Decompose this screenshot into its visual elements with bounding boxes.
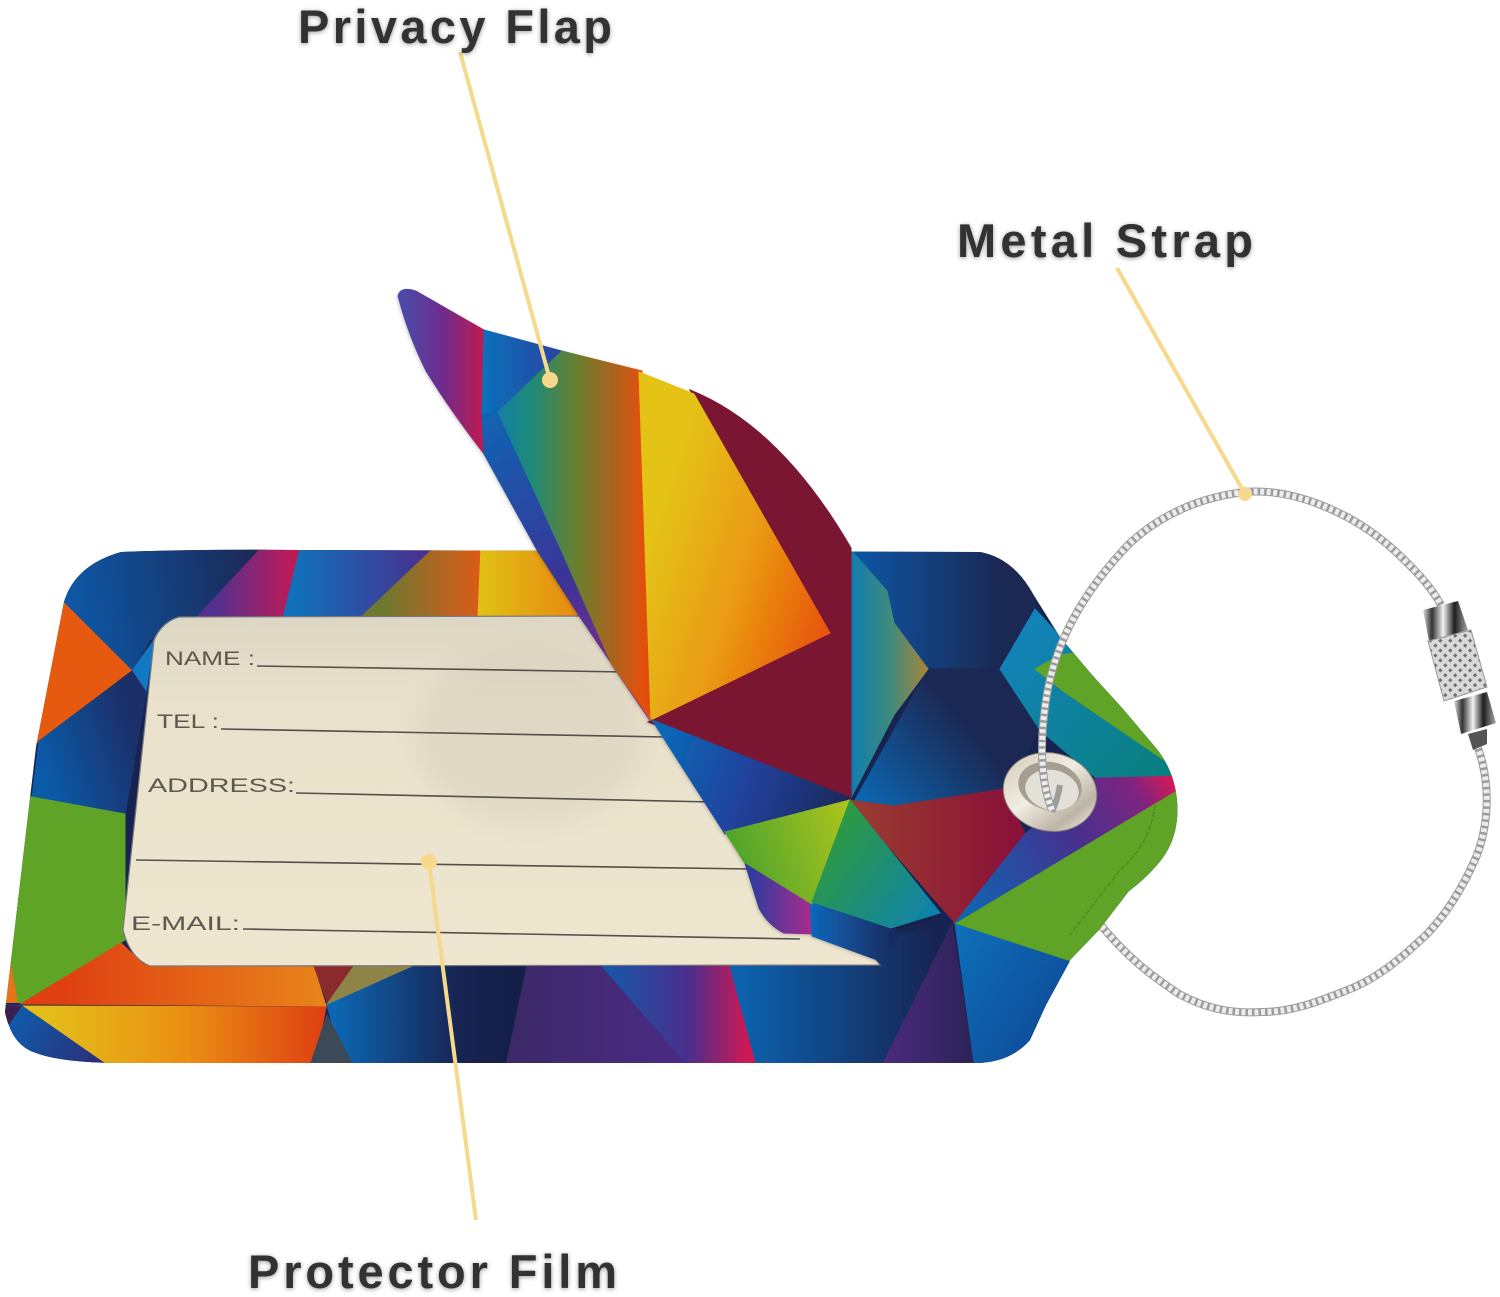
form field lines [136, 666, 800, 939]
heading: privacy flap: Privacy Flap [298, 0, 612, 53]
blue facet [652, 720, 851, 834]
lime facet [725, 800, 850, 904]
eyelet grommet [996, 744, 1104, 840]
callout line: protector film [421, 854, 476, 1220]
privacy flap [398, 289, 940, 961]
lower blue edge facet [810, 900, 897, 961]
form labels: NAME : [165, 649, 255, 670]
magenta edge facet [744, 860, 814, 934]
metal strap: screw clasp [1423, 601, 1496, 750]
callout line: metal strap [1117, 268, 1252, 501]
callout line: privacy flap [460, 52, 558, 388]
metal strap: upper cable [1042, 492, 1441, 810]
form labels: ADDRESS: [148, 776, 295, 797]
luggage tag body [0, 540, 1200, 1070]
form labels: TEL : [157, 712, 219, 733]
flap tip facet [398, 289, 484, 454]
form labels [131, 649, 295, 935]
top-left navy facet [60, 545, 270, 671]
form labels: E-MAIL: [131, 914, 240, 935]
green teal facet [812, 800, 940, 928]
heading: protector film: Protector Film [248, 1245, 617, 1297]
heading: metal strap: Metal Strap [957, 214, 1253, 267]
right navy facets [851, 545, 1040, 669]
metal strap: lower cable behind tag [1100, 745, 1487, 1012]
yellow orange facet [639, 372, 830, 720]
protector film window [123, 616, 880, 966]
dark red facet [648, 390, 851, 800]
rainbow gradient facet [498, 351, 654, 724]
